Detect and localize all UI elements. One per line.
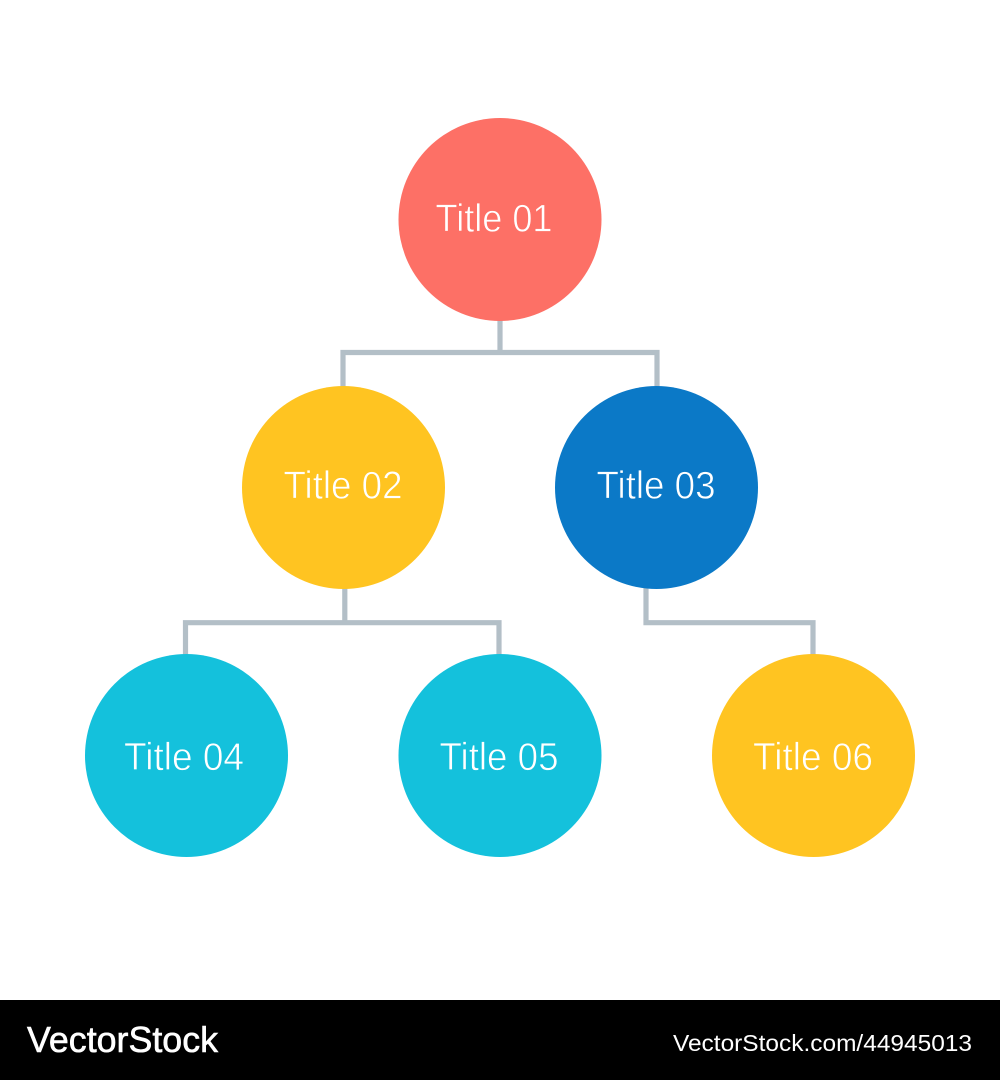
watermark footer bar	[0, 1000, 1000, 1080]
watermark logo text: VectorStock	[27, 1019, 219, 1060]
node: title 04	[85, 654, 288, 857]
node: title 06: Title 06	[753, 736, 873, 779]
node: title 01	[398, 118, 602, 321]
connector: title 02 to 04 and 05	[186, 588, 499, 656]
connector: title 03 to 06	[646, 588, 813, 656]
connector: title 01 to 02 and 03	[343, 320, 657, 388]
watermark url text: VectorStock.com/44945013	[673, 1030, 972, 1056]
node: title 05: Title 05	[440, 736, 558, 779]
node: title 06	[712, 654, 915, 857]
node: title 05	[398, 654, 602, 857]
node: title 02	[242, 386, 445, 589]
node: title 03	[555, 386, 758, 589]
node: title 02: Title 02	[284, 464, 402, 508]
node: title 04: Title 04	[124, 736, 244, 779]
node: title 01: Title 01	[436, 198, 552, 240]
node: title 03: Title 03	[596, 464, 716, 508]
